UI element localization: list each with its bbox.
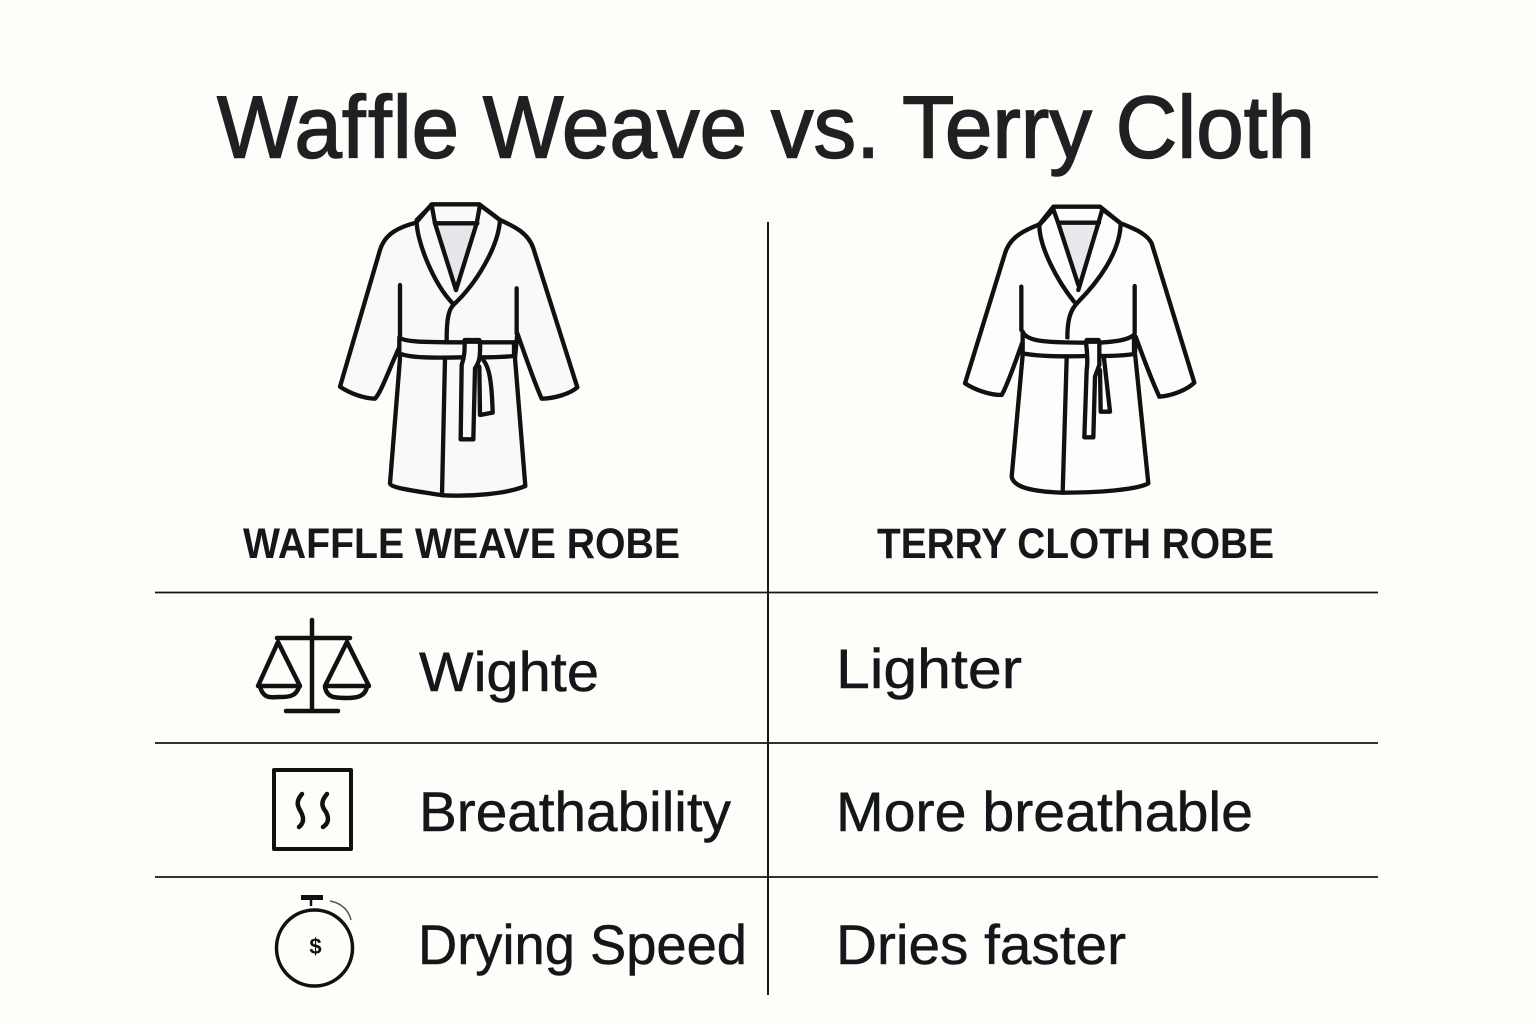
icon: stopwatch with dollar sign: $ xyxy=(309,934,322,959)
label: weight row: Wighte xyxy=(419,640,599,703)
heading: waffle weave robe: WAFFLE WEAVE ROBE xyxy=(243,520,680,568)
title: Waffle Weave vs. Terry Cloth xyxy=(217,78,1315,176)
icon: stopwatch with dollar sign xyxy=(276,898,352,986)
value: lighter: Lighter xyxy=(836,637,1022,700)
icon: breathability square with waves xyxy=(274,770,351,849)
icon: terry cloth robe xyxy=(965,207,1194,493)
label: breathability row: Breathability xyxy=(419,780,731,843)
icon: balance scale xyxy=(258,620,369,711)
value: more breathable: More breathable xyxy=(836,780,1253,843)
icon: waffle weave robe xyxy=(340,204,577,496)
value: dries faster: Dries faster xyxy=(836,913,1126,976)
table grid lines xyxy=(155,222,1378,995)
heading: terry cloth robe: TERRY CLOTH ROBE xyxy=(877,520,1274,568)
label: drying speed row: Drying Speed xyxy=(418,913,747,976)
